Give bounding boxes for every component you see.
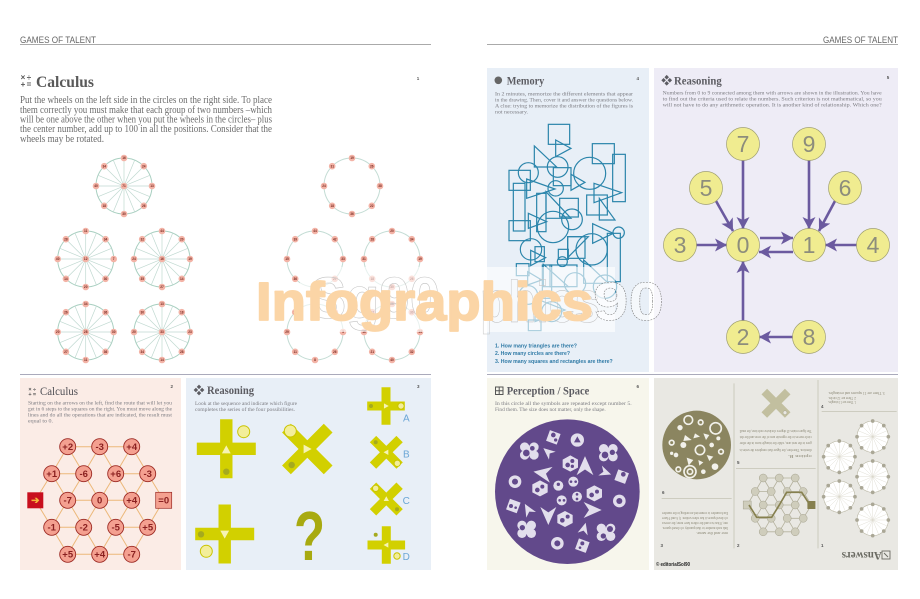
empty circle 5: 16 — [362, 330, 366, 334]
empty circle 3: 18 — [370, 277, 374, 281]
wheel 4: 20 — [56, 330, 60, 334]
section numbers: 3 — [660, 543, 663, 548]
node values: +6 — [110, 469, 121, 480]
option D: D — [403, 552, 410, 563]
icon: calculus symbols: + — [28, 392, 32, 398]
option C: C — [403, 496, 410, 507]
wheel 1: 40 — [94, 184, 98, 188]
wheel 2: 28 — [64, 237, 68, 241]
digits: 8 — [803, 324, 815, 350]
icon: calculus symbols: × — [21, 73, 26, 82]
heading: Calculus — [40, 386, 78, 398]
icon: calculus symbols: × — [28, 387, 32, 393]
end square — [156, 492, 172, 508]
question mark: ? — [294, 497, 325, 575]
instructions text — [20, 95, 272, 145]
heading: Calculus — [36, 74, 94, 91]
empty circle 1: 31 — [330, 164, 334, 168]
node values: -5 — [111, 523, 121, 534]
node values: -7 — [127, 550, 136, 561]
upside-down answer text 5: direction. Therefore, the figure that completes the series is — [740, 447, 812, 453]
digits: 6 — [839, 175, 851, 201]
panel: calculus route — [20, 378, 181, 570]
node values: +4 — [126, 442, 138, 453]
icon: calculus symbols: ÷ — [33, 387, 36, 393]
heading: Reasoning — [674, 75, 722, 87]
wheel 4: 11 — [84, 358, 88, 362]
start arrow square — [27, 492, 43, 508]
instructions text: lines and do all the operations that are indicated, the result must — [28, 412, 173, 418]
wheel 5: 34 — [140, 350, 144, 354]
panel: perception — [487, 378, 649, 570]
empty circle 2: 33 — [341, 257, 345, 261]
upside-down answer text 5: goes to the next arm, while the triangle turns in the other — [739, 440, 812, 446]
wheel 2: 20 — [84, 285, 88, 289]
wheel 1: 26 — [142, 204, 146, 208]
wheel 4: 34 — [84, 302, 88, 306]
upside-down answer text 4 — [828, 391, 885, 405]
panel: reasoning numbers — [654, 68, 898, 372]
heading: Reasoning — [207, 385, 254, 397]
empty circle 4: 27 — [313, 302, 317, 306]
wheel 3: 32 — [140, 237, 144, 241]
instructions text: will be one above the other when you put the wheels in the circles– plus — [20, 115, 272, 126]
section number: 6 — [636, 384, 639, 389]
icon: grid — [496, 387, 503, 394]
icon: calculus symbols: = — [33, 392, 36, 398]
digits: 5 — [700, 175, 712, 201]
empty circle 3: 34 — [410, 237, 414, 241]
digits: 1 — [803, 232, 815, 258]
instructions text: wheels may be rotated. — [20, 134, 104, 145]
option B — [360, 426, 413, 479]
wheel 3: 35 — [140, 277, 144, 281]
wheel 4: 36 — [104, 350, 107, 354]
wheel 5: 33 — [160, 330, 164, 334]
node values: +4 — [94, 550, 106, 561]
section number: 4 — [636, 76, 639, 81]
upside-down answer text 4: 2. There are 12 circles. — [828, 396, 856, 401]
upside-down answer text 3: link each number to that quantity of closed spaces. — [662, 526, 728, 531]
wheel 4: 27 — [64, 350, 68, 354]
wheel 5: 18 — [180, 310, 184, 314]
node values: -3 — [143, 469, 152, 480]
empty circle 3: 31 — [362, 257, 366, 261]
empty circle 4 — [284, 301, 346, 363]
option A: A — [403, 414, 410, 424]
upside-down answer text 4: 3. There are 11 squares and rectangles. — [828, 391, 885, 396]
wheel 2: 34 — [104, 237, 107, 241]
wheel 4: 26 — [64, 310, 68, 314]
wheel 3: 20 — [180, 237, 184, 241]
left header: GAMES OF TALENT — [20, 35, 96, 45]
empty circle 1 — [321, 155, 383, 217]
upside-down answer text 3: of closed spaces it has when written: 0, 6 and 9 have — [662, 515, 728, 521]
section numbers — [660, 404, 824, 548]
panel: calculus wheels — [20, 73, 423, 363]
icon: lobed diamond — [194, 385, 204, 395]
answer 6: olive circle — [662, 411, 731, 479]
empty circle 2: 44 — [313, 229, 317, 233]
wheel 1: 13 — [150, 184, 154, 188]
node values: +5 — [142, 523, 154, 534]
empty circle 4: 3 — [342, 330, 344, 334]
wheel 5: 30 — [140, 310, 144, 314]
empty circle 4: 26 — [333, 350, 337, 354]
instructions text: Starting on the arrows on the left, find the route that will let you — [28, 400, 172, 406]
option D — [368, 526, 410, 564]
answers dividers — [662, 380, 897, 548]
wheel 4: 36 — [104, 310, 107, 314]
wheel 3: 16 — [160, 257, 164, 261]
right header: GAMES OF TALENT — [823, 35, 898, 45]
empty circle 2: 27 — [333, 277, 337, 281]
empty circle 5: 25 — [390, 302, 394, 306]
digits: 9 — [803, 131, 815, 157]
watermark text: Infographics — [256, 272, 593, 332]
digits: 3 — [674, 232, 686, 258]
panel: reasoning crosses — [186, 378, 431, 575]
figure 2 — [266, 407, 349, 491]
instructions text: Find them. The size does not matter, only the shape. — [495, 407, 606, 413]
hexagon route diagram — [27, 439, 172, 562]
node values: +1 — [46, 469, 58, 480]
wheel 2: 40 — [56, 257, 60, 261]
arrows — [696, 160, 857, 337]
empty circle 2: 15 — [285, 257, 289, 261]
option A — [367, 387, 410, 425]
upside-down answer text 3: one, 8 has two and the others have none; the arrows — [662, 520, 728, 526]
empty circle 4: 29 — [285, 330, 289, 334]
node values: -3 — [95, 442, 104, 453]
watermark ghost outline: phics — [480, 270, 600, 335]
instructions text — [195, 400, 298, 413]
watermark ghost outline — [310, 266, 600, 335]
empty circle 1: 26 — [370, 164, 374, 168]
wheel 1: 30 — [122, 212, 126, 216]
empty circle 2: 36 — [293, 277, 297, 281]
instructions text: Put the wheels on the left side in the circles on the right side. To place — [20, 95, 272, 106]
empty circle 5: 14 — [418, 330, 422, 334]
empty circle 1: 22 — [370, 204, 374, 208]
empty circle 1: 19 — [350, 156, 354, 160]
answer 1: solved wheels — [822, 419, 890, 538]
figure 3 — [195, 504, 254, 564]
instructions text: not necessary. — [495, 110, 528, 116]
empty circle 5: 32 — [410, 350, 414, 354]
empty circle 1: 24 — [322, 184, 326, 188]
empty circle 1: 18 — [330, 204, 334, 208]
section number: 5 — [887, 75, 890, 80]
instructions text: the center number, add up to 100 in all the positions. Consider that the — [20, 124, 272, 135]
overlapping shapes figure — [509, 124, 625, 331]
empty circle 5: 12 — [370, 310, 374, 314]
instructions text: equal to 0. — [28, 418, 53, 424]
instructions text: In 2 minutes, memorize the different elements that appear — [495, 91, 633, 98]
empty circle 2 — [284, 228, 346, 290]
wheel 5: 28 — [180, 350, 184, 354]
icon: calculus symbols — [21, 73, 32, 89]
node values: 0 — [97, 496, 102, 507]
answers heading upside down: Answers — [841, 549, 882, 561]
panel: memory — [487, 68, 649, 372]
upside-down answer text 3 — [662, 511, 728, 536]
instructions text: get in 6 steps to the squares on the right. You must move along the — [28, 406, 173, 412]
upside-down answer text 5: The figure rotates 45 degrees clockwise each time, the small — [739, 428, 812, 434]
empty circle 3: 20 — [390, 229, 394, 233]
wheel 5 — [131, 301, 193, 363]
upside-down answer text 4: 1. There are 11 triangles. — [828, 400, 856, 405]
icon: calculus symbols: + — [21, 80, 26, 89]
empty circle 3 — [361, 228, 423, 290]
heading: Perception / Space — [507, 385, 589, 397]
wheel 3: 27 — [160, 285, 164, 289]
node values: -7 — [63, 496, 72, 507]
section number: 3 — [417, 384, 420, 389]
wheel 1: 34 — [102, 164, 106, 168]
empty circle 1: 36 — [350, 212, 354, 216]
answer 2: hexagon solution — [743, 474, 815, 536]
node values: -6 — [79, 469, 88, 480]
divider right — [487, 374, 898, 375]
wheel 1: 24 — [142, 164, 146, 168]
instructions text: will not have to do any arithmetic operation. It is another kind of relationship. Which one? — [663, 102, 882, 109]
wheel 1: 71 — [122, 184, 126, 188]
instructions text — [663, 89, 882, 109]
digits: 4 — [867, 232, 880, 258]
wheel 3: 24 — [132, 257, 136, 261]
wheel 5: 14 — [160, 358, 164, 362]
node values: +4 — [126, 496, 138, 507]
icon: calculus symbols: = — [27, 80, 32, 89]
wheel 2: 30 — [104, 277, 107, 281]
empty circle 5: 30 — [410, 310, 414, 314]
number circles — [664, 128, 890, 354]
empty circle 3: 26 — [410, 277, 414, 281]
instructions text — [28, 400, 173, 424]
empty circle 4: 18 — [293, 310, 297, 314]
wheel 3: 14 — [180, 277, 184, 281]
purple symbol circle — [495, 419, 640, 564]
digits — [674, 131, 880, 350]
node values — [46, 442, 154, 561]
icon: dot — [494, 76, 502, 84]
section numbers: 1 — [821, 543, 824, 548]
questions list: 2. How many circles are there? — [495, 351, 570, 357]
instructions text: Look at the sequence and indicate which figure — [195, 400, 298, 407]
icon: calculus symbols: ÷ — [27, 73, 32, 82]
wheel 3 — [131, 228, 193, 290]
upside-down answer text 3: Each number is connected according to the number — [662, 511, 728, 516]
end square: =0 — [158, 496, 169, 507]
instructions text: Numbers from 0 to 9 connected among them with arrows are shown in the illustration. You have — [663, 89, 882, 96]
empty circle 5 — [361, 301, 423, 363]
wheel 2: 14 — [64, 277, 68, 281]
node values: +2 — [62, 442, 73, 453]
node values: -2 — [79, 523, 88, 534]
empty circle 2: 39 — [293, 237, 297, 241]
instructions text: A clue: trying to memorize the distribution of the figures is — [495, 102, 633, 110]
questions list: 3. How many squares and rectangles are there? — [495, 359, 613, 365]
digits: 7 — [737, 131, 749, 157]
wheel 5: 23 — [188, 330, 192, 334]
digits: 2 — [737, 324, 749, 350]
option B: B — [403, 450, 410, 460]
empty circle 4: 22 — [333, 310, 337, 314]
option C — [360, 472, 413, 526]
wheel 4: 28 — [84, 330, 88, 334]
figure 1 — [197, 419, 256, 478]
digits: 0 — [737, 232, 749, 258]
node values: -1 — [47, 523, 57, 534]
empty circle 2: 21 — [313, 285, 317, 289]
empty circle 5: 40 — [390, 358, 394, 362]
wheel 5: 20 — [132, 330, 136, 334]
answer 5: olive cross — [753, 380, 799, 427]
wheel 1: 16 — [122, 156, 126, 160]
section number: 2 — [170, 384, 173, 389]
watermark text: 90 — [593, 272, 664, 332]
empty circle 2: 42 — [333, 237, 337, 241]
upside-down answer text 5: circle moves to the opposite arm of the cross and the dot — [739, 435, 812, 440]
wheel 4 — [54, 301, 117, 363]
wheel 2: 7 — [113, 257, 115, 261]
wheel 2: 11 — [84, 229, 88, 233]
wheel 4: 30 — [112, 330, 116, 334]
instructions text: them correctly you must make that each group of two numbers –which — [20, 105, 272, 116]
icon: calculus symbols — [28, 387, 36, 398]
node values: +5 — [62, 550, 74, 561]
questions list: 1. How many triangles are there? — [495, 344, 577, 350]
wheel 2: 12 — [84, 257, 88, 261]
questions list — [495, 344, 613, 365]
section number: 1 — [417, 76, 420, 81]
publisher credit: © editorialSol90 — [656, 561, 690, 568]
empty circle 1: 38 — [378, 184, 382, 188]
instructions text — [495, 401, 632, 413]
icon: lobed diamond — [661, 75, 672, 86]
heading: Memory — [507, 75, 545, 87]
upside-down answer text 5: option B. — [788, 454, 812, 459]
upside-down answer text 3: one and the same. — [696, 531, 728, 536]
wheel 5: 13 — [160, 302, 164, 306]
empty circle 4: 8 — [314, 358, 316, 362]
start arrow square: ➔ — [31, 496, 40, 506]
wheel 1 — [93, 155, 155, 217]
empty circle 4: 11 — [294, 350, 297, 354]
wheel 1: 18 — [102, 204, 106, 208]
icon: answers box — [882, 551, 890, 559]
wheel 3: 44 — [160, 229, 164, 233]
empty circle 3: 30 — [390, 285, 394, 289]
section numbers: 2 — [737, 543, 740, 548]
instructions text: In this circle all the symbols are repeated except number 5. — [495, 401, 632, 407]
empty circle 5: 21 — [370, 350, 374, 354]
wheel 3: 19 — [188, 257, 192, 261]
instructions text: in the drawing. Then, cover it and answer the questions below. — [495, 98, 633, 104]
section numbers: 5 — [737, 460, 740, 465]
empty circle 3: 28 — [370, 237, 374, 241]
watermark band — [300, 267, 615, 332]
panel: answers — [654, 378, 898, 570]
watermark ghost outline: Sg90 — [310, 266, 440, 331]
instructions text: completes the series of the four possibilities. — [195, 406, 295, 413]
instructions text: to find out the criteria used to relate the numbers. Such criterion is not mathematical, so you — [663, 95, 882, 102]
upside-down answer text 5 — [739, 428, 812, 459]
section numbers: 6 — [662, 490, 665, 495]
empty circle 3: 19 — [418, 257, 422, 261]
divider left — [20, 374, 431, 375]
instructions text — [495, 91, 633, 116]
section numbers: 4 — [821, 404, 824, 409]
wheel 2 — [54, 228, 117, 290]
